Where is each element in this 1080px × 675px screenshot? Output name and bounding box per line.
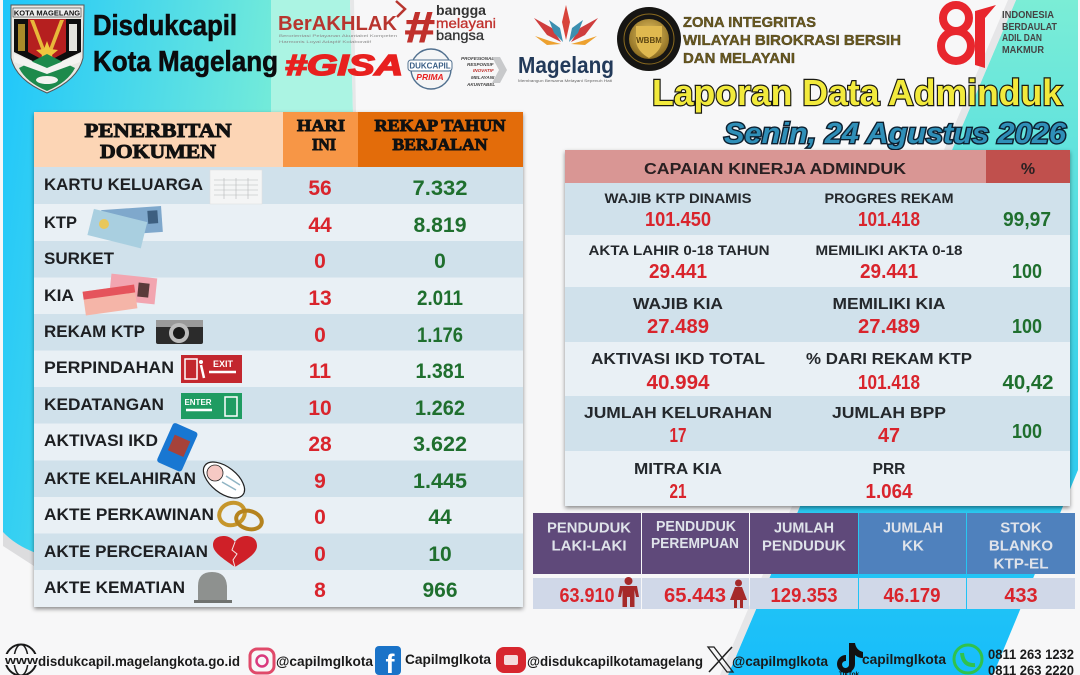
stat: laki-laki	[547, 520, 639, 607]
row: akta lahir: 29.441	[649, 261, 707, 283]
logo: Magelang: Magelang	[518, 52, 614, 78]
icon: Kota Magelang shield: KOTA MAGELANG	[14, 8, 80, 18]
row: KIA: 13	[308, 287, 332, 310]
row: KIA: 27.489	[858, 316, 920, 338]
row: KIA	[633, 296, 1042, 338]
logo: BerAKHLAK	[278, 1, 405, 44]
row: kedatangan: 1.262	[415, 397, 465, 420]
stat: stok blanko: KTP-EL	[994, 556, 1048, 572]
row: rekam KTP: 1.176	[417, 324, 463, 347]
row: aktivasi IKD: 28	[308, 433, 332, 456]
text: Zona Integritas	[683, 15, 901, 67]
row: akte perceraian: 0	[314, 543, 326, 566]
row: akta lahir: 29.441	[860, 261, 918, 283]
text: Zona Integritas: WILAYAH BIROKRASI BERSIH	[683, 33, 901, 49]
logo: Dukcapil Prima: AKUNTABEL	[466, 82, 495, 87]
table header: BERJALAN	[392, 135, 488, 154]
row: akte kematian	[44, 572, 458, 603]
row: aktivasi IKD: 3.622	[413, 433, 467, 456]
logo: bangga melayani bangsa: melayani	[436, 15, 496, 31]
logo: HUT 81: INDONESIA	[1002, 10, 1054, 21]
stat: laki-laki: 63.910	[560, 585, 614, 607]
logo: BerAKHLAK: BerAKHLAK	[278, 13, 398, 35]
emblem: Zona Integritas	[617, 7, 681, 71]
row: kedatangan: 10	[308, 397, 332, 420]
stat: perempuan	[651, 518, 747, 608]
row: surket: SURKET	[44, 250, 114, 268]
icon: youtube	[496, 647, 526, 673]
row: kelurahan: 17	[670, 425, 686, 447]
row: KIA: 100	[1012, 316, 1042, 338]
panel header	[565, 150, 1070, 183]
text: Zona Integritas: ZONA INTEGRITAS	[683, 15, 816, 31]
row: perpindahan: PERPINDAHAN	[44, 359, 174, 377]
row: KIA: MEMILIKI KIA	[832, 296, 946, 313]
row: akte kelahiran: AKTE KELAHIRAN	[44, 470, 196, 488]
logo: HUT 81	[941, 5, 1057, 68]
row: IKD: % DARI REKAM KTP	[806, 351, 972, 368]
row: akta lahir: 100	[1012, 261, 1042, 283]
logo: BerAKHLAK: Berorientasi Pelayanan Akuntabel Kompeten	[279, 33, 397, 38]
logo: #GISA: #GISA	[285, 50, 403, 82]
table header: PENERBITAN	[84, 120, 232, 142]
text: youtube: @disdukcapilkotamagelang	[527, 653, 703, 669]
logo: bangga melayani bangsa	[404, 2, 496, 52]
emblem: Zona Integritas: WBBM	[636, 36, 662, 45]
row: mitra: 21	[670, 481, 686, 503]
row: KTP dinamis: 101.418	[858, 209, 920, 231]
row: kelurahan: 47	[878, 425, 900, 447]
row: surket: 0	[314, 250, 326, 273]
icon: X	[708, 647, 733, 672]
row: KIA: WAJIB KIA	[633, 296, 723, 313]
text: X: @capilmglkota	[732, 653, 828, 669]
logo: bangga melayani bangsa: bangga	[436, 2, 486, 18]
row: akta lahir	[588, 242, 1042, 283]
row: rekam KTP: REKAM KTP	[44, 323, 145, 341]
stat: jumlah penduduk: JUMLAH	[774, 520, 834, 536]
row: akta lahir: MEMILIKI AKTA 0-18	[816, 242, 963, 258]
icon: tiktok	[837, 643, 863, 675]
stat: perempuan: 65.443	[664, 585, 726, 607]
logo: Dukcapil Prima: MELAYANI	[471, 75, 495, 80]
footer: contact bar	[4, 643, 1074, 675]
row: surket: 0	[434, 250, 446, 273]
table header: HARI	[297, 116, 345, 135]
table header: DOKUMEN	[100, 141, 217, 163]
row: kedatangan: ENTER	[184, 398, 212, 407]
logo: Dukcapil Prima: RESPONSIF	[467, 62, 494, 67]
logo: BerAKHLAK: Harmonis Loyal Adaptif Kolaboratif	[279, 39, 372, 44]
logo: Magelang	[518, 5, 614, 83]
text: website: disdukcapil.magelangkota.go.id	[38, 653, 240, 669]
row: IKD: 40,42	[1002, 372, 1054, 394]
text: Zona Integritas: DAN MELAYANI	[683, 51, 795, 67]
text: tiktok: capilmglkota	[862, 651, 946, 667]
logo: Dukcapil Prima: DUKCAPIL	[409, 62, 451, 70]
row: akte kematian: AKTE KEMATIAN	[44, 579, 185, 597]
row: aktivasi IKD	[44, 422, 467, 472]
row: akte kelahiran: 9	[314, 470, 326, 493]
stat: jumlah penduduk: PENDUDUK	[762, 538, 846, 554]
row: akte perceraian: AKTE PERCERAIAN	[44, 543, 208, 561]
table header: REKAP TAHUN	[374, 116, 506, 135]
row: akte perkawinan: 44	[428, 506, 452, 529]
text: facebook: Capilmglkota	[405, 651, 491, 667]
row: akte perceraian	[44, 536, 452, 567]
row: KIA: 2.011	[417, 287, 463, 310]
logo: Dukcapil Prima: PRIMA	[416, 72, 444, 82]
row: IKD: AKTIVASI IKD TOTAL	[591, 351, 765, 368]
stat: jumlah KK	[883, 520, 943, 607]
logo: Dukcapil Prima: PROFESIONAL	[461, 56, 494, 61]
row: kelurahan	[584, 405, 1042, 447]
logo: HUT 81: BERDAULAT	[1002, 22, 1057, 33]
stat: stok blanko	[989, 520, 1053, 607]
row: akte kematian: 966	[422, 579, 458, 602]
heading: date: Senin, 24 Agustus 2026	[724, 118, 1067, 150]
row: KIA: KIA	[44, 287, 74, 305]
row: IKD	[591, 351, 1054, 394]
logo: HUT 81: MAKMUR	[1002, 45, 1045, 56]
row: KIA: 27.489	[647, 316, 709, 338]
icon: facebook	[375, 646, 401, 675]
row: rekam KTP: 0	[314, 324, 326, 347]
row: KTP: 8.819	[414, 214, 466, 237]
row: KTP: KTP	[44, 214, 77, 232]
row: mitra: 1.064	[866, 481, 913, 503]
icon: Kota Magelang shield	[11, 5, 84, 93]
row: rekam KTP	[44, 320, 463, 347]
stat: jumlah KK: 46.179	[884, 585, 940, 607]
row: KTP	[44, 206, 466, 248]
row: kedatangan: KEDATANGAN	[44, 396, 164, 414]
stat: laki-laki: LAKI-LAKI	[552, 538, 626, 554]
row: perpindahan	[44, 355, 465, 383]
row: kedatangan	[44, 393, 465, 420]
table header: INI	[312, 135, 336, 154]
panel header: CAPAIAN KINERJA ADMINDUK	[644, 161, 906, 178]
text: phone numbers	[988, 646, 1074, 675]
row: akte perceraian: 10	[428, 543, 452, 566]
panel: population stats	[533, 513, 1075, 609]
row: akte kelahiran: 1.445	[413, 470, 467, 493]
row: akte perkawinan: AKTE PERKAWINAN	[44, 506, 214, 524]
title: Disdukcapil Kota Magelang: Disdukcapil	[93, 10, 237, 42]
zebra rows	[34, 167, 523, 570]
row: kartu keluarga: KARTU KELUARGA	[44, 176, 203, 194]
logo: Magelang: Membangun Bersama Melayani Sepenuh Hati	[518, 78, 612, 83]
row: kartu keluarga: 56	[308, 177, 332, 200]
row: IKD: 40.994	[646, 372, 710, 394]
row: kelurahan: JUMLAH BPP	[832, 405, 946, 422]
heading: Laporan Data Adminduk: Laporan Data Adminduk	[652, 72, 1063, 113]
icon: www globe: www	[4, 655, 39, 667]
row: akte kelahiran	[44, 455, 467, 505]
icon: instagram	[250, 649, 274, 673]
row: surket	[44, 250, 446, 273]
stat: jumlah KK: KK	[902, 538, 924, 554]
row: perpindahan: 11	[309, 360, 331, 383]
logo: bangga melayani bangsa: #	[404, 3, 435, 52]
icon: whatsapp	[954, 645, 982, 673]
logo: HUT 81: ADIL DAN	[1002, 33, 1042, 44]
row: KTP: 44	[308, 214, 332, 237]
stat: jumlah KK: JUMLAH	[883, 520, 943, 536]
row: mitra	[634, 461, 913, 503]
row: KTP dinamis: WAJIB KTP DINAMIS	[604, 190, 752, 206]
stat: jumlah penduduk: 129.353	[770, 585, 838, 607]
row: mitra: MITRA KIA	[634, 461, 722, 478]
row: mitra: PRR	[873, 461, 905, 478]
panel header: %	[1021, 161, 1035, 178]
title: Disdukcapil Kota Magelang	[93, 10, 278, 78]
row: IKD: 101.418	[858, 372, 920, 394]
stat: stok blanko: BLANKO	[989, 538, 1053, 554]
row: akte kematian: 8	[314, 579, 326, 602]
icon: www globe	[4, 644, 40, 675]
row: akte perkawinan	[44, 499, 452, 532]
row: KTP dinamis: 99,97	[1003, 209, 1051, 231]
row: kelurahan: 100	[1012, 421, 1042, 443]
logo: Dukcapil Prima: INOVATIF	[473, 68, 494, 73]
panel: capaian kinerja adminduk	[565, 150, 1070, 506]
stat: stok blanko: 433	[1004, 585, 1038, 607]
row: KTP dinamis: 101.450	[645, 209, 711, 231]
row: perpindahan: EXIT	[213, 359, 233, 369]
table header	[34, 112, 523, 167]
row: akte perkawinan: 0	[314, 506, 326, 529]
text: instagram: @capilmglkota	[276, 653, 373, 669]
row: KTP dinamis	[604, 190, 1051, 231]
row: KTP dinamis: PROGRES REKAM	[824, 190, 954, 206]
logo: bangga melayani bangsa: bangsa	[436, 27, 484, 43]
stat: jumlah penduduk	[762, 520, 846, 607]
panel: penerbitan dokumen table	[34, 112, 523, 607]
row: KIA	[44, 274, 463, 316]
title: Disdukcapil Kota Magelang: Kota Magelang	[93, 46, 278, 78]
text: phone numbers: 0811 263 1232	[988, 646, 1074, 662]
row: kartu keluarga: 7.332	[412, 177, 468, 200]
row: kartu keluarga	[44, 170, 468, 204]
logo: Dukcapil Prima	[408, 49, 507, 89]
row: aktivasi IKD: AKTIVASI IKD	[44, 432, 158, 450]
stat: perempuan: PENDUDUK	[656, 518, 736, 535]
stat: perempuan: PEREMPUAN	[651, 535, 739, 552]
row: akta lahir: AKTA LAHIR 0-18 TAHUN	[588, 242, 770, 258]
row: perpindahan: 1.381	[416, 360, 465, 383]
stat: laki-laki: PENDUDUK	[547, 520, 631, 536]
stat: stok blanko: STOK	[1000, 520, 1042, 536]
row: kelurahan: JUMLAH KELURAHAN	[584, 405, 772, 422]
